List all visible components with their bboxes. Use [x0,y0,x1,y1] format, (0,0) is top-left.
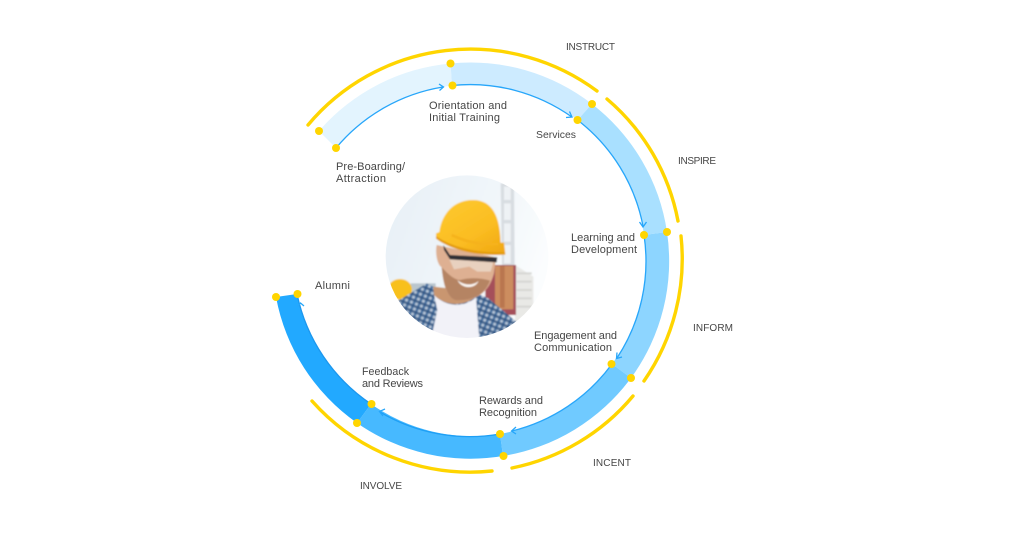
stage labels: INSPIRE [678,156,716,167]
stage labels: INCENT [593,458,631,469]
stage labels: INVOLVE [360,481,402,492]
yellow arc: INFORM [644,236,682,381]
step label: Engagement: Communication [534,342,612,354]
ring segment: engagement [500,364,631,456]
step label: Feedback: Feedback [362,366,410,378]
ring segment: feedback [276,294,371,423]
step label: Rewards: Rewards and [479,395,543,407]
stage labels [360,42,733,492]
step label: Learning [571,232,637,256]
step label: Orientation: Initial Training [429,112,500,124]
yellow arc: INSTRUCT [308,49,597,125]
ring segment: services [578,104,667,235]
step label: Engagement: Engagement and [534,330,617,342]
shirt [398,283,516,337]
glasses [443,245,497,262]
step label: Engagement [534,330,617,354]
crane tower [501,183,515,265]
step label: Services: Services [536,130,576,141]
step label: Learning: Development [571,244,637,256]
stage labels: INFORM [693,323,733,334]
background buildings [411,283,436,294]
stage labels: INSTRUCT [566,42,615,53]
face [436,245,496,300]
step label: Rewards [479,395,543,419]
step label: Pre-Boarding: Pre-Boarding/ [336,161,406,173]
yellow milestone dots [272,60,671,460]
step label: Feedback: and Reviews [362,378,424,390]
small hat [388,279,412,300]
ring segment: pre-boarding [319,64,452,148]
step label: Orientation [429,100,507,124]
yellow arc: INCENT [512,396,633,468]
neck [433,287,477,304]
photo: construction worker in yellow hard hat [386,176,534,338]
step label: Orientation: Orientation and [429,100,507,112]
step label: Feedback [362,366,424,390]
step label: Pre-Boarding: Attraction [336,173,386,185]
yellow arc: INSPIRE [607,99,678,221]
hard hat [436,200,505,254]
step label: Alumni: Alumni [315,280,350,292]
inner flow line with arrows [297,84,646,437]
step label: Learning: Learning and [571,232,635,244]
ring segment: learning [612,232,669,378]
yellow arc: INVOLVE [312,401,492,472]
ring segment: rewards [357,404,503,459]
step label: Rewards: Recognition [479,407,537,419]
ring segment: orientation [450,62,592,120]
step label: Pre-Boarding [336,161,406,185]
